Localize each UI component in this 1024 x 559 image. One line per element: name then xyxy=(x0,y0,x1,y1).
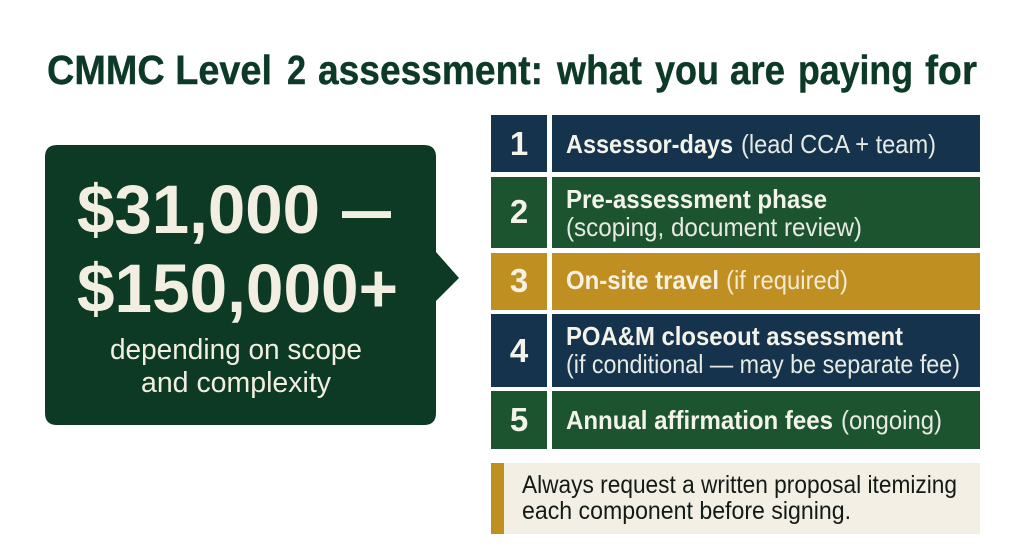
row 3: on-site travel: On-site travel xyxy=(566,265,719,295)
title: assessment: xyxy=(318,47,543,93)
price qualifier: and complexity xyxy=(141,367,331,399)
note: written proposal advice: Always request a written proposal itemizing xyxy=(522,471,957,499)
row 2: pre-assessment phase xyxy=(491,177,980,248)
row 1: assessor-days: (lead CCA + team) xyxy=(741,129,936,159)
price range xyxy=(77,171,398,327)
panel: price range callout xyxy=(45,145,459,425)
price range: — xyxy=(342,171,391,248)
row 4: POA&M closeout assessment: (if conditional — may be separate fee) xyxy=(566,349,960,379)
title: paying xyxy=(798,47,913,93)
row 4: POA&M closeout assessment: POA&M closeout assessment xyxy=(566,321,903,351)
row 1: assessor-days xyxy=(491,115,980,172)
title xyxy=(47,47,977,93)
row 5: annual affirmation fees xyxy=(491,391,980,449)
row 4: POA&M closeout assessment xyxy=(491,314,980,387)
row 2: pre-assessment phase: Pre-assessment phase xyxy=(566,184,827,214)
note: written proposal advice xyxy=(491,463,980,534)
title: 2 xyxy=(287,47,306,93)
row 2: pre-assessment phase: (scoping, document review) xyxy=(566,212,862,242)
note: written proposal advice: each component before signing. xyxy=(522,497,851,525)
title: are xyxy=(730,47,785,93)
row 3: on-site travel xyxy=(491,253,980,310)
row 1: assessor-days: 1 xyxy=(510,125,528,162)
title: you xyxy=(655,47,719,93)
row 3: on-site travel: 3 xyxy=(510,262,528,299)
row 4: POA&M closeout assessment: 4 xyxy=(510,332,529,369)
row 1: assessor-days: Assessor-days xyxy=(566,129,733,159)
title: CMMC Level xyxy=(47,47,272,93)
row 5: annual affirmation fees: Annual affirmation fees xyxy=(566,405,833,435)
price qualifier xyxy=(110,334,362,399)
price range: $150,000+ xyxy=(77,250,398,327)
row 3: on-site travel: (if required) xyxy=(726,265,848,295)
row 5: annual affirmation fees: (ongoing) xyxy=(841,405,942,435)
title: for xyxy=(925,47,977,93)
price qualifier: depending on scope xyxy=(110,334,362,366)
row 2: pre-assessment phase: 2 xyxy=(510,193,528,230)
price range: $31,000 xyxy=(77,171,320,248)
title: what xyxy=(556,47,642,93)
callout shape with arrow xyxy=(45,145,459,425)
row 5: annual affirmation fees: 5 xyxy=(510,401,528,438)
